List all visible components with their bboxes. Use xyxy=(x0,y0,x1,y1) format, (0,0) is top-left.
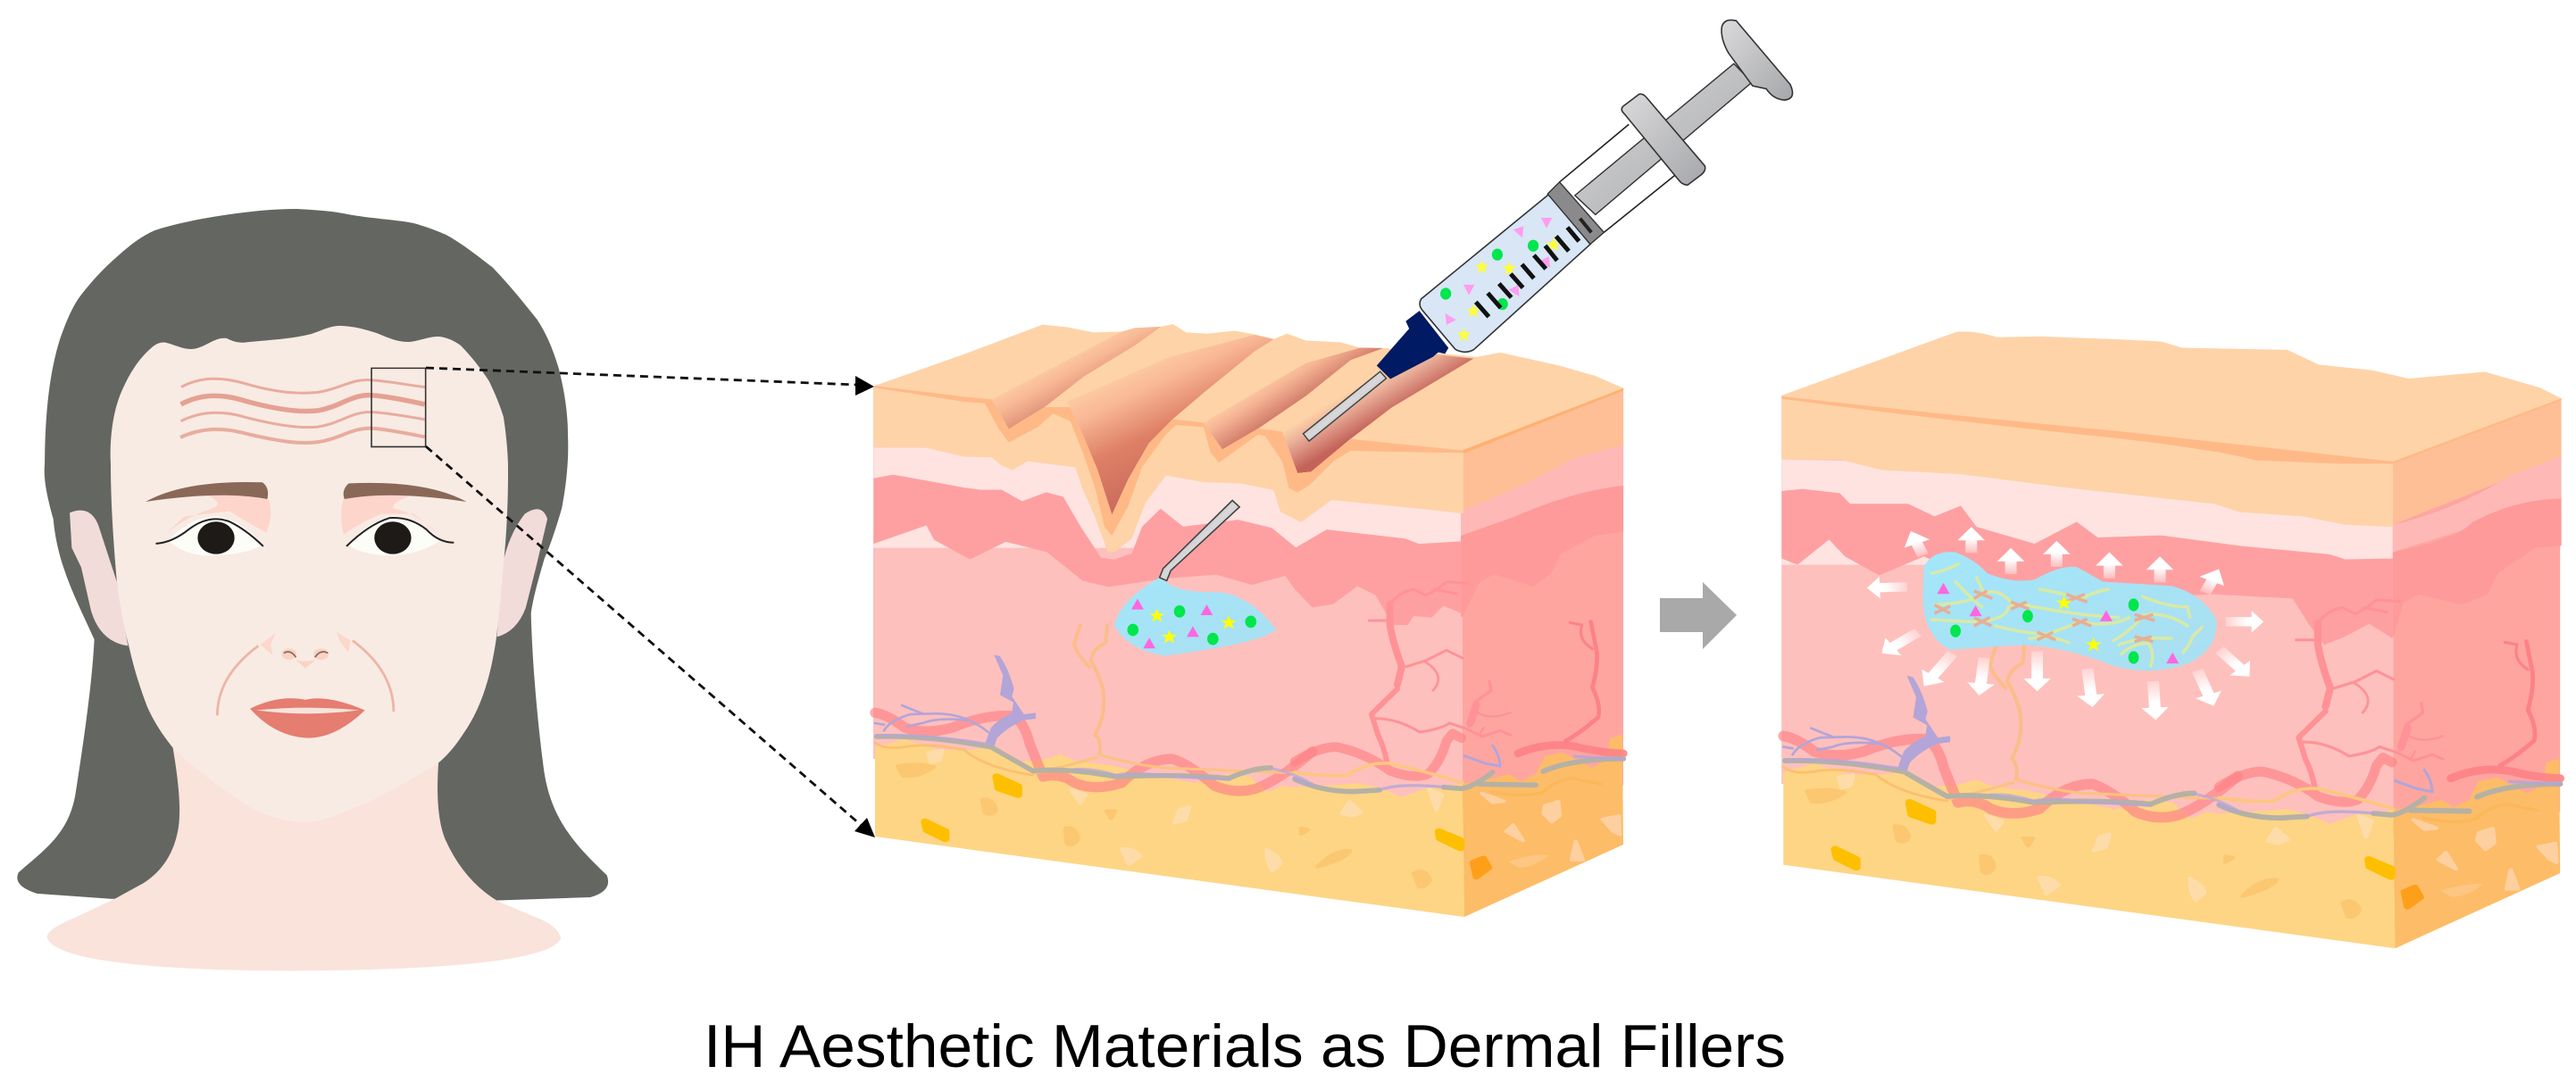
upper skin band layers xyxy=(873,324,1623,625)
ears xyxy=(70,509,547,645)
expanded filler deposit xyxy=(1923,552,2216,670)
white expansion arrows xyxy=(1866,527,2263,720)
vessels and nerves xyxy=(1783,600,2560,821)
upper skin layers, smoothed xyxy=(1781,331,2562,645)
dermis and fat layers xyxy=(873,386,1623,917)
dashed arrow to top of skin block xyxy=(426,368,874,396)
panel: woman's face xyxy=(17,209,608,970)
neck and shoulders xyxy=(47,745,561,970)
luer hub xyxy=(1377,311,1448,379)
plunger thumb rest xyxy=(1722,20,1793,100)
seal tick xyxy=(1580,219,1591,232)
lips xyxy=(250,698,365,738)
fiber crosslinks xyxy=(1934,591,2155,642)
dermis and fat layers xyxy=(1781,396,2560,948)
nasolabial folds xyxy=(217,640,394,715)
hair xyxy=(17,209,608,900)
zoom box on forehead xyxy=(371,368,426,446)
dashed arrow to bottom of skin block xyxy=(426,446,875,837)
filler deposit with particles xyxy=(1114,578,1277,655)
arrow: before to after xyxy=(1660,582,1737,649)
empty barrel outline xyxy=(1560,124,1676,232)
needle xyxy=(1304,371,1387,441)
barrel flange xyxy=(1621,94,1705,185)
title caption: IH Aesthetic Materials as Dermal Fillers xyxy=(704,1012,1786,1080)
vessels and nerves xyxy=(875,582,1623,795)
left eye xyxy=(155,516,263,555)
plunger rod xyxy=(1575,63,1752,214)
nose xyxy=(261,631,351,669)
eyebrows xyxy=(146,482,467,502)
wrinkle walls and epidermis front xyxy=(873,327,1473,552)
panel: treated skin block after filler xyxy=(1781,331,2562,948)
right eye xyxy=(346,516,454,555)
filled barrel xyxy=(1420,194,1590,352)
collagen fibers xyxy=(1932,564,2202,666)
syringe xyxy=(1304,20,1793,441)
syringe scale ticks xyxy=(1476,219,1591,317)
eye shadow xyxy=(158,493,441,541)
plunger seal xyxy=(1547,182,1604,245)
needle tip in dermis xyxy=(1160,501,1239,580)
face xyxy=(111,326,508,823)
forehead wrinkles xyxy=(180,379,425,443)
particles in syringe xyxy=(1440,218,1560,341)
panel: wrinkled skin block with injection xyxy=(873,324,1623,917)
